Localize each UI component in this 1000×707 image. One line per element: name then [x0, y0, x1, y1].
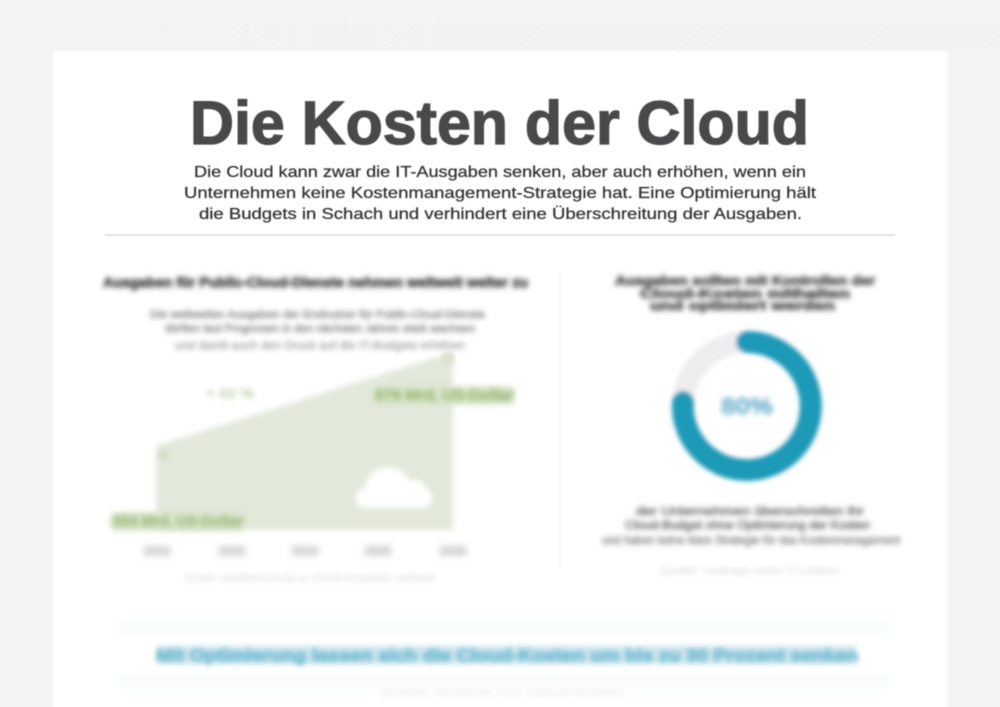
donut heading: Cloud-Kosten mithalten: [640, 286, 850, 301]
donut chart: [683, 342, 811, 470]
panel: bottom banner: [118, 621, 890, 699]
chart description: Die weltweiten Ausgaben der Endnutzer für Public-Cloud-Dienste: [150, 309, 485, 321]
markers: [158, 450, 168, 460]
intro text: Die Cloud kann zwar die IT-Ausgaben senken, aber auch erhöhen, wenn ein: [194, 164, 806, 181]
x-axis labels: 2026: [440, 544, 467, 558]
panel: donut statistic: [602, 273, 901, 577]
chart heading: Ausgaben für Public-Cloud-Dienste nehmen weltweit weiter zu: [103, 274, 528, 290]
intro text: die Budgets in Schach und verhindert eine Überschreitung der Ausgaben.: [199, 205, 802, 223]
chart description: und damit auch den Druck auf die IT-Budgets erhöhen: [175, 340, 465, 352]
donut description: [602, 504, 901, 547]
icon: cloud: [356, 467, 432, 508]
x-axis labels: [144, 544, 467, 558]
x-axis labels: 2022: [144, 544, 171, 558]
donut heading: und optimiert werden: [650, 298, 835, 313]
background hatch: [150, 22, 1000, 50]
donut source: Quelle: Umfrage unter IT-Leitern: [660, 566, 838, 577]
x-axis labels: 2023: [219, 544, 246, 558]
chart description: dürften laut Prognosen in den nächsten Jahren stark wachsen: [165, 323, 475, 335]
donut description: Cloud-Budget ohne Optimierung der Kosten: [625, 518, 870, 532]
intro text: Unternehmen keine Kostenmanagement-Strategie hat. Eine Optimierung hält: [184, 185, 817, 202]
donut description: und haben keine klare Strategie für das Kostenmanagement: [602, 533, 901, 547]
donut heading: [615, 273, 875, 313]
x-axis labels: 2025: [365, 544, 392, 558]
callout: light green label: + 92 %: [206, 385, 255, 401]
banner bands: [118, 621, 890, 635]
donut value: 80%: [721, 393, 773, 419]
title: Die Kosten der Cloud: [190, 89, 809, 157]
x-axis labels: 2024: [292, 544, 319, 558]
panel: cloud spending chart: [103, 274, 528, 584]
banner source: Quelle: Analyse von Cloud-Kosten: [380, 688, 625, 699]
callout: right value: 679 Mrd. US-Dollar: [375, 387, 513, 404]
area chart: [156, 352, 453, 530]
chart description: [150, 309, 485, 352]
chart source: Quelle: Marktforschung zu Cloud-Ausgaben, weltweit: [185, 573, 435, 584]
intro text: [184, 164, 817, 223]
donut description: der Unternehmen überschreiten ihr: [636, 504, 864, 518]
donut heading: Ausgaben sollten mit Kontrollen der: [615, 273, 875, 288]
divider: [105, 234, 895, 236]
callout: left value: 354 Mrd. US-Dollar: [113, 513, 243, 530]
banner text: Mit Optimierung lassen sich die Cloud-Kosten um bis zu 30 Prozent senken: [156, 646, 858, 665]
